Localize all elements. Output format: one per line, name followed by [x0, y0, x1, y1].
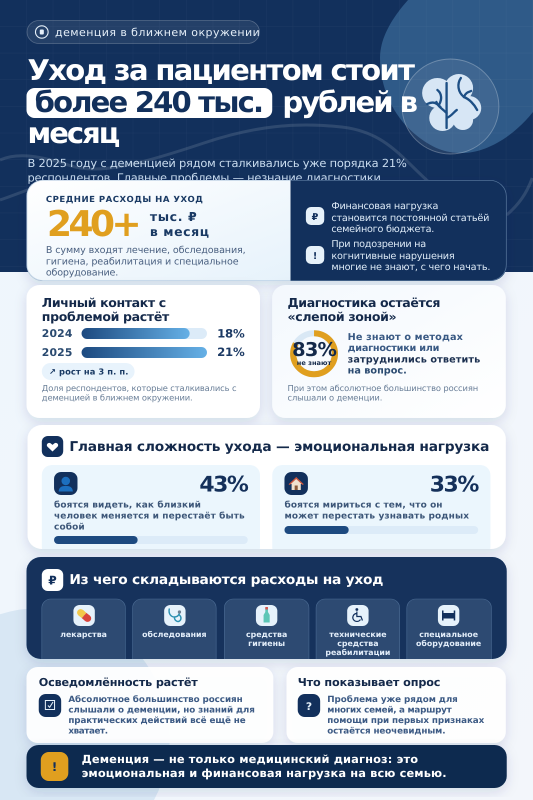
- stat card 33%: [272, 465, 490, 557]
- left part: costs: [27, 180, 291, 281]
- tile: medicines: [42, 598, 126, 659]
- donut chart: не знают: [297, 359, 332, 367]
- left part: costs: оборудование.: [46, 268, 118, 278]
- panel: awareness: Осведомлённость растёт: [39, 676, 198, 689]
- text: хватает.: [68, 726, 108, 736]
- heading: Личный контакт с: [42, 296, 166, 310]
- tile: equipment: специальное: [419, 630, 478, 639]
- heading: Диагностика остаётся: [288, 296, 440, 310]
- stat card 33%: 33%: [430, 472, 479, 498]
- panel: diagnostics: [272, 285, 506, 418]
- stat card 43%: боятся видеть, как близкий: [54, 500, 201, 510]
- tile: medicines: лекарства: [60, 630, 107, 639]
- note: [42, 383, 237, 402]
- text: многих семей, а маршрут: [327, 706, 452, 716]
- text: остаётся неочевидным.: [327, 726, 446, 736]
- stat card 43%: человек меняется и перестаёт быть: [54, 512, 245, 522]
- stat card 33%: боятся мириться с тем, что он: [284, 500, 443, 510]
- bar chart: 21%: [217, 345, 245, 359]
- tile: hygiene: гигиены: [248, 639, 285, 648]
- bar chart: 2025: [42, 347, 72, 359]
- panel: personal contact: [27, 285, 260, 418]
- text: [68, 695, 255, 736]
- icon: brain: [402, 59, 499, 154]
- text: практических действий всё ещё не: [68, 716, 246, 726]
- heading: «слепой зоной»: [288, 310, 397, 324]
- tile: rehabilitation: [316, 598, 400, 659]
- right part: burden notes: становится постоянной статьёй: [331, 213, 489, 224]
- icon: ruble: [42, 569, 63, 591]
- left part: costs: 240+: [47, 204, 142, 245]
- title: Уход за пациентом стоит: [28, 54, 415, 87]
- text: помощи при первых признаках: [327, 716, 485, 726]
- donut description: диагностики или: [348, 343, 439, 354]
- left part: costs: гигиена, реабилитация и специальное: [46, 256, 239, 268]
- text: Проблема уже рядом для: [327, 695, 458, 705]
- tile: equipment: оборудование: [416, 639, 481, 648]
- callout text: [82, 753, 447, 780]
- panel: average costs: [27, 180, 507, 281]
- note: При этом абсолютное большинство россиян: [288, 383, 478, 393]
- right part: burden notes: [291, 180, 507, 281]
- callout text: Деменция — не только медицинский диагноз: это: [82, 753, 418, 766]
- left part: costs: В сумму входят лечение, обследования,: [46, 245, 246, 256]
- icon: question: [298, 694, 320, 717]
- tile: rehabilitation: реабилитации: [325, 648, 390, 657]
- text: Абсолютное большинство россиян: [68, 695, 243, 705]
- heading: Главная сложность ухода — эмоциональная нагрузка: [69, 439, 489, 455]
- title: [27, 54, 418, 150]
- panel: awareness: [27, 667, 273, 743]
- bar chart: 18%: [217, 326, 245, 340]
- subtitle: В 2025 году с деменцией рядом сталкивались уже порядка 21%: [28, 157, 407, 170]
- donut chart: [292, 333, 337, 374]
- panel: emotional burden: [28, 425, 506, 557]
- callout text: эмоциональная и финансовая нагрузка на всю семью.: [82, 767, 447, 780]
- panel: cost structure: [27, 557, 507, 679]
- stat card 33%: может перестать узнавать родных: [284, 512, 469, 522]
- tile: hygiene: средства: [246, 630, 287, 639]
- title: месяц: [28, 117, 120, 150]
- right part: burden notes: когнитивные нарушения: [331, 251, 455, 262]
- note: [288, 383, 478, 402]
- tile: rehabilitation: средства: [337, 639, 379, 648]
- stat card 43%: 43%: [199, 472, 249, 498]
- text: [327, 695, 485, 736]
- right part: burden notes: !: [313, 251, 317, 262]
- subtitle: [28, 157, 407, 184]
- right part: burden notes: Финансовая нагрузка: [331, 201, 438, 212]
- tile: hygiene: [224, 598, 310, 659]
- right part: burden notes: многие не знают, с чего начать.: [331, 262, 490, 273]
- icon: heart: [42, 436, 63, 457]
- note: Доля респондентов, которые сталкивались с: [42, 383, 237, 393]
- right part: burden notes: ₽: [312, 212, 319, 223]
- donut description: на вопрос.: [348, 366, 407, 376]
- heading: Из чего складываются расходы на уход: [69, 572, 383, 588]
- donut description: Не знают о методах: [348, 332, 463, 343]
- hero background: [0, 0, 533, 272]
- right part: burden notes: семейного бюджета.: [331, 224, 434, 235]
- heading: проблемой растёт: [42, 310, 170, 324]
- title: более 240 тыс.: [35, 86, 264, 119]
- icon: warning: [41, 752, 68, 781]
- note: слышали о деменции.: [288, 392, 382, 402]
- tile: examinations: обследования: [142, 630, 207, 639]
- growth badge: [42, 363, 135, 380]
- stat card 43%: [42, 465, 260, 557]
- left part: costs: СРЕДНИЕ РАСХОДЫ НА УХОД: [46, 194, 204, 204]
- tag pill: [27, 20, 260, 44]
- subtitle: респондентов. Главные проблемы — незнание диагностики.: [28, 172, 384, 184]
- note: деменцией в ближнем окружении.: [42, 392, 193, 402]
- title: рублей в: [282, 86, 418, 119]
- right part: burden notes: При подозрении на: [331, 239, 426, 250]
- panel: survey: [287, 667, 506, 743]
- bar chart: [42, 326, 245, 359]
- icon: warning: !: [52, 760, 57, 774]
- icon: checkbox: [39, 694, 61, 717]
- donut chart: 83%: [292, 339, 337, 361]
- panel: survey: Что показывает опрос: [298, 676, 440, 689]
- bar chart: 2024: [42, 328, 72, 340]
- tile: examinations: [132, 598, 216, 659]
- callout: [27, 745, 507, 788]
- tile: equipment: [406, 598, 492, 659]
- icon: question: ?: [306, 701, 312, 713]
- donut description: затруднились ответить: [348, 354, 480, 366]
- donut description: [348, 332, 480, 376]
- icon: ruble: ₽: [48, 574, 57, 588]
- growth badge: ↗ рост на 3 п. п.: [49, 366, 128, 376]
- stat card 43%: собой: [54, 522, 85, 532]
- text: слышали о деменции, но знаний для: [68, 706, 255, 716]
- heading: [288, 296, 440, 324]
- tag pill: деменция в ближнем окружении: [55, 26, 260, 39]
- tile: rehabilitation: технические: [329, 630, 387, 639]
- left part: costs: в месяц: [150, 225, 209, 239]
- heading: [42, 296, 170, 324]
- left part: costs: тыс. ₽: [150, 210, 197, 224]
